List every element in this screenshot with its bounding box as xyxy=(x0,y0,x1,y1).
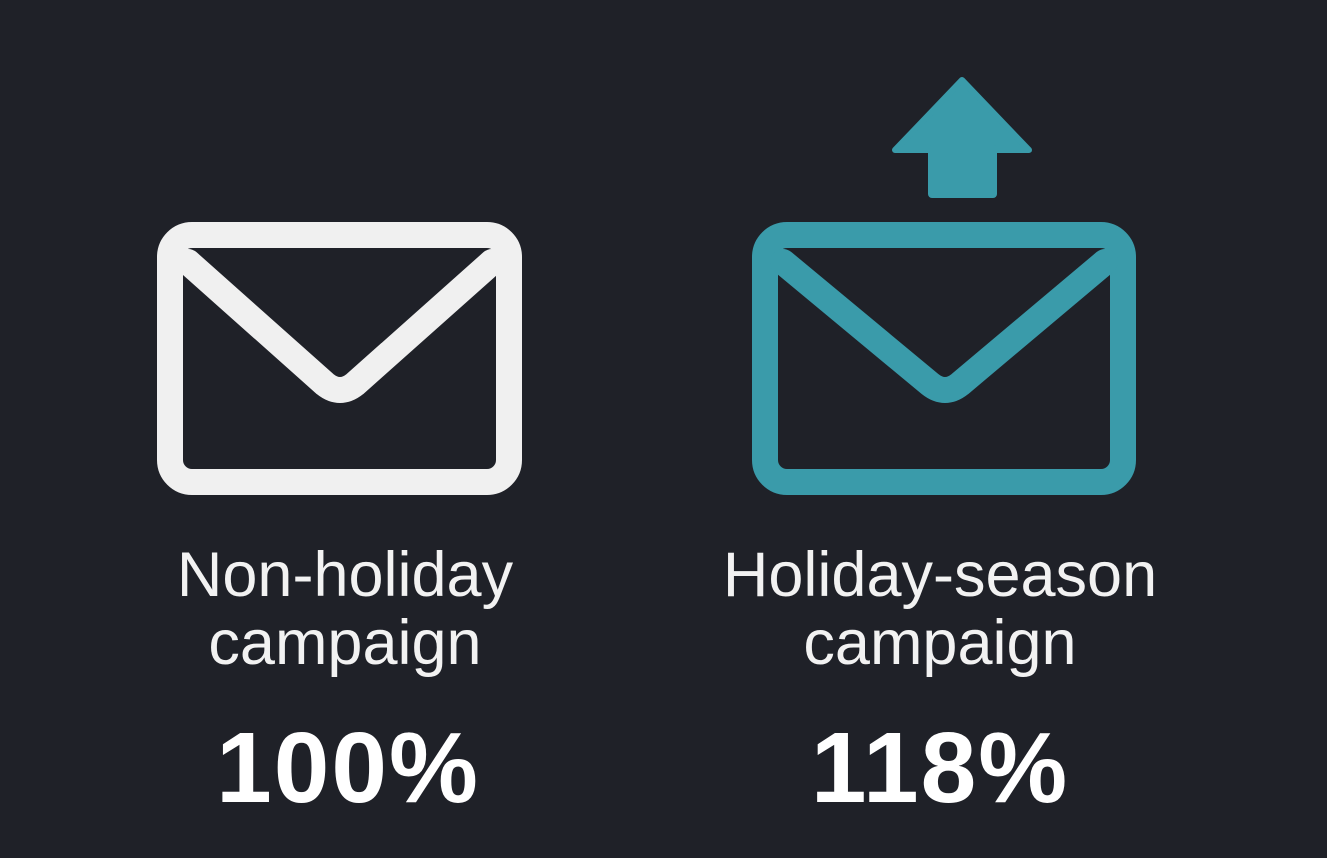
icon: white envelope xyxy=(170,235,509,482)
label: holiday xyxy=(723,540,1157,678)
label: holiday: Holiday-season xyxy=(723,540,1157,610)
label: non-holiday: Non-holiday xyxy=(177,540,513,610)
arrow: up xyxy=(895,80,1029,198)
value: 118%: 118% xyxy=(811,712,1069,824)
label: non-holiday: campaign xyxy=(208,608,482,678)
label: non-holiday xyxy=(177,540,513,678)
label: holiday: campaign xyxy=(803,608,1077,678)
icon: teal envelope xyxy=(765,235,1123,482)
value: 100%: 100% xyxy=(216,712,480,824)
